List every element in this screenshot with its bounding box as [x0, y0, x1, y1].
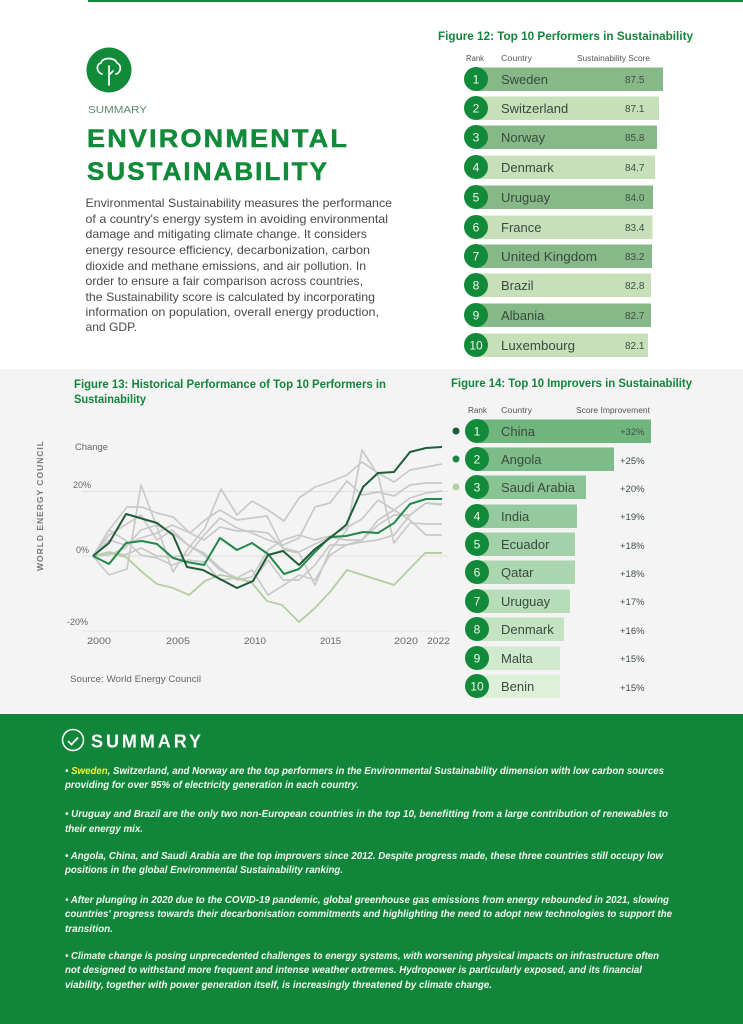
row: Benin: 10: [470, 680, 484, 694]
row: Qatar: [465, 560, 645, 584]
row: Denmark: [464, 155, 655, 179]
row: Angola: 2: [474, 452, 481, 466]
row: Sweden: Sweden: [501, 72, 548, 87]
row: United Kingdom: United Kingdom: [501, 249, 597, 264]
figure 14 title: Figure 14: Top 10 Improvers in Sustainability: [451, 376, 692, 390]
intro text block: damage and mitigating climate change. It considers: [86, 227, 367, 241]
line: Angola: [93, 499, 442, 574]
row: Ecuador: +18%: [620, 541, 645, 552]
row: France: 83.4: [625, 223, 645, 234]
y axis labels: 0%: [76, 545, 90, 556]
icon: tree in green circle: [86, 48, 132, 92]
x axis labels: 2010: [244, 636, 266, 647]
chart: top 10 performers table: [464, 67, 663, 357]
figure 13 title: [74, 377, 386, 406]
row: France: France: [501, 220, 541, 235]
row: Albania: 82.7: [625, 311, 645, 322]
bullet: top improvers: [64, 850, 664, 876]
figure 12 table header: Country: [501, 54, 532, 63]
y axis labels: [67, 442, 108, 628]
y axis labels: Change: [75, 442, 108, 453]
bullet: climate change: not designed to withstand more frequent and intense weather extremes. Hydropower is particularly exposed, and its financial: [65, 964, 643, 976]
row: Malta: Malta: [501, 651, 534, 666]
intro text block: dioxide and methane emissions, and air pollution. In: [86, 259, 366, 273]
row: Benin: [465, 674, 645, 698]
bullet: top performers: • Sweden, Switzerland, and Norway are the top performers in the Environmental Sustainability dimension with low carbon sources: [65, 765, 664, 777]
row: Norway: 85.8: [625, 133, 645, 144]
row: Ecuador: [465, 532, 645, 556]
other country lines: [93, 450, 442, 595]
row: France: 6: [473, 220, 480, 234]
row: Uruguay: 84.0: [625, 193, 645, 204]
row: Norway: Norway: [501, 130, 546, 145]
y axis labels: -20%: [67, 617, 89, 628]
row: Denmark: 4: [473, 160, 480, 174]
row: United Kingdom: 7: [473, 250, 480, 264]
bullet: emissions rebound: • After plunging in 2020 due to the COVID-19 pandemic, global greenhouse gas emissions from energy rebounded in 2021, slowing: [65, 894, 670, 906]
row: Malta: 9: [474, 652, 481, 666]
intro text block: information on population, overall energy production,: [86, 305, 379, 319]
row: China: +32%: [620, 427, 645, 438]
row: Albania: Albania: [501, 308, 545, 323]
row: Saudi Arabia: +20%: [620, 484, 645, 495]
row: France: [464, 215, 652, 239]
row: Qatar: +18%: [620, 569, 645, 580]
row: Benin: Benin: [501, 679, 534, 694]
intro text block: order to ensure a fair comparison across countries,: [86, 274, 363, 288]
row: Uruguay: Uruguay: [501, 594, 551, 609]
row: Denmark: [465, 617, 645, 641]
row: India: 4: [474, 510, 481, 524]
line: Saudi Arabia: [93, 553, 442, 622]
row: India: India: [501, 509, 530, 524]
row: Ecuador: Ecuador: [501, 537, 550, 552]
bullet: climate change: [65, 950, 659, 991]
row: Angola: Angola: [501, 452, 542, 467]
figure 12 title: Figure 12: Top 10 Performers in Sustainability: [438, 29, 693, 43]
intro text block: of a country's energy system in avoiding environmental: [86, 212, 388, 226]
figure 13 title: Figure 13: Historical Performance of Top 10 Performers in: [74, 377, 386, 391]
row: United Kingdom: 83.2: [625, 252, 645, 263]
row: Uruguay: 7: [474, 594, 481, 608]
row: Switzerland: Switzerland: [501, 101, 568, 116]
row: Saudi Arabia: 3: [474, 480, 481, 494]
main heading: SUSTAINABILITY: [87, 158, 329, 186]
figure 14 table header: Country: [501, 406, 532, 415]
figure 14 table header: Score Improvement: [576, 406, 651, 415]
summary heading: SUMMARY: [91, 732, 201, 752]
row: India: [465, 504, 645, 528]
row: Brazil: Brazil: [501, 278, 534, 293]
row: Denmark: 84.7: [625, 163, 645, 174]
row: India: +19%: [620, 512, 645, 523]
bullet: top performers: [64, 765, 664, 791]
x axis labels: [87, 636, 450, 647]
line chart: historical performance: [67, 442, 450, 647]
row: Switzerland: [464, 96, 659, 120]
icon: check mark: [62, 730, 84, 750]
row: China: [465, 419, 651, 443]
bullet: non-European countries: [65, 808, 669, 835]
x axis labels: 2005: [166, 636, 190, 647]
legend dots: [452, 428, 460, 490]
source note: Source: World Energy Council: [70, 674, 201, 684]
row: Malta: [465, 646, 645, 670]
row: Saudi Arabia: [465, 475, 645, 499]
row: Sweden: 1: [473, 72, 480, 86]
x axis labels: 2015: [320, 636, 341, 647]
main heading: [87, 125, 349, 186]
intro text block: and GDP.: [86, 320, 137, 334]
main heading: ENVIRONMENTAL: [87, 125, 349, 153]
row: Denmark: Denmark: [501, 160, 554, 175]
bullet: emissions rebound: transition.: [65, 923, 113, 935]
bullet: top improvers: • Angola, China, and Saudi Arabia are the top improvers since 2012. Despite progress made, these three countries still occupy low: [65, 850, 664, 862]
row: Ecuador: 5: [474, 538, 481, 552]
row: Denmark: Denmark: [501, 622, 554, 637]
row: Saudi Arabia: Saudi Arabia: [501, 480, 576, 495]
row: Uruguay: [465, 589, 645, 613]
bullet: emissions rebound: countries' progress towards their decarbonisation commitments and highlighting the need to adopt new technologies to support the: [65, 908, 672, 920]
bullet: top improvers: positions in the global Environmental Sustainability ranking.: [64, 864, 343, 876]
row: Denmark: +16%: [620, 626, 645, 637]
row: Luxembourg: Luxembourg: [501, 338, 575, 353]
row: Qatar: Qatar: [501, 565, 534, 580]
row: Brazil: [464, 273, 651, 297]
row: Benin: +15%: [620, 683, 645, 694]
figure 14 table header: Rank: [468, 406, 488, 415]
row: Denmark: 8: [474, 622, 481, 636]
bullet: climate change: viability, together with power generation itself, is increasingly threatened by climate change.: [65, 979, 492, 991]
bullet: emissions rebound: [65, 894, 672, 935]
row: China: 1: [474, 424, 481, 438]
row: Albania: [464, 303, 651, 327]
row: Qatar: 6: [474, 566, 481, 580]
row: Uruguay: [464, 185, 653, 209]
row: Norway: [464, 125, 657, 149]
bullet: non-European countries: • Uruguay and Brazil are the only two non-European countries in the top 10, benefitting from a large contribution of renewables to: [65, 808, 669, 820]
chart: top 10 improvers table: [465, 419, 651, 698]
row: Angola: +25%: [620, 456, 645, 467]
bullet: top performers: providing for over 95% of electricity generation in each country.: [64, 779, 359, 791]
row: Luxembourg: [464, 333, 648, 357]
vertical side label: WORLD ENERGY COUNCIL: [35, 441, 45, 571]
figure 12 table header: [466, 54, 651, 63]
x axis labels: 2020: [394, 636, 418, 647]
x axis labels: 2000: [87, 636, 111, 647]
intro text block: Environmental Sustainability measures the performance: [86, 196, 392, 210]
section label: summary: SUMMARY: [88, 104, 147, 116]
intro text block: the Sustainability score is calculated by incorporating: [86, 290, 375, 304]
row: Brazil: 8: [473, 278, 480, 292]
row: Uruguay: +17%: [620, 597, 645, 608]
row: Switzerland: 2: [473, 102, 480, 116]
row: Switzerland: 87.1: [625, 104, 645, 115]
row: Malta: +15%: [620, 654, 645, 665]
row: Sweden: [464, 67, 663, 91]
row: Uruguay: Uruguay: [501, 190, 551, 205]
x axis labels: 2022: [427, 636, 450, 647]
row: Angola: [465, 447, 645, 471]
row: United Kingdom: [464, 244, 652, 268]
row: Luxembourg: 82.1: [625, 341, 645, 352]
row: Uruguay: 5: [473, 190, 480, 204]
row: Luxembourg: 10: [469, 338, 483, 352]
figure 13 title: Sustainability: [74, 392, 146, 406]
row: Albania: 9: [473, 308, 480, 322]
figure 12 table header: Sustainability Score: [577, 54, 651, 63]
y axis labels: 20%: [73, 480, 92, 491]
bullet: non-European countries: their energy mix.: [65, 823, 143, 835]
line: China: [93, 447, 442, 588]
row: China: China: [501, 424, 536, 439]
row: Sweden: 87.5: [625, 75, 645, 86]
intro text block: energy resource efficiency, decarbonization, carbon: [86, 243, 370, 257]
bullet: climate change: • Climate change is posing unprecedented challenges to energy systems, with worsening physical impacts on infrastructure often: [65, 950, 659, 962]
panel: summary: [0, 714, 743, 1024]
figure 12 table header: Rank: [466, 54, 485, 63]
row: Brazil: 82.8: [625, 281, 645, 292]
row: Norway: 3: [473, 130, 480, 144]
intro text block: [86, 196, 392, 334]
figure 14 table header: [468, 406, 651, 415]
